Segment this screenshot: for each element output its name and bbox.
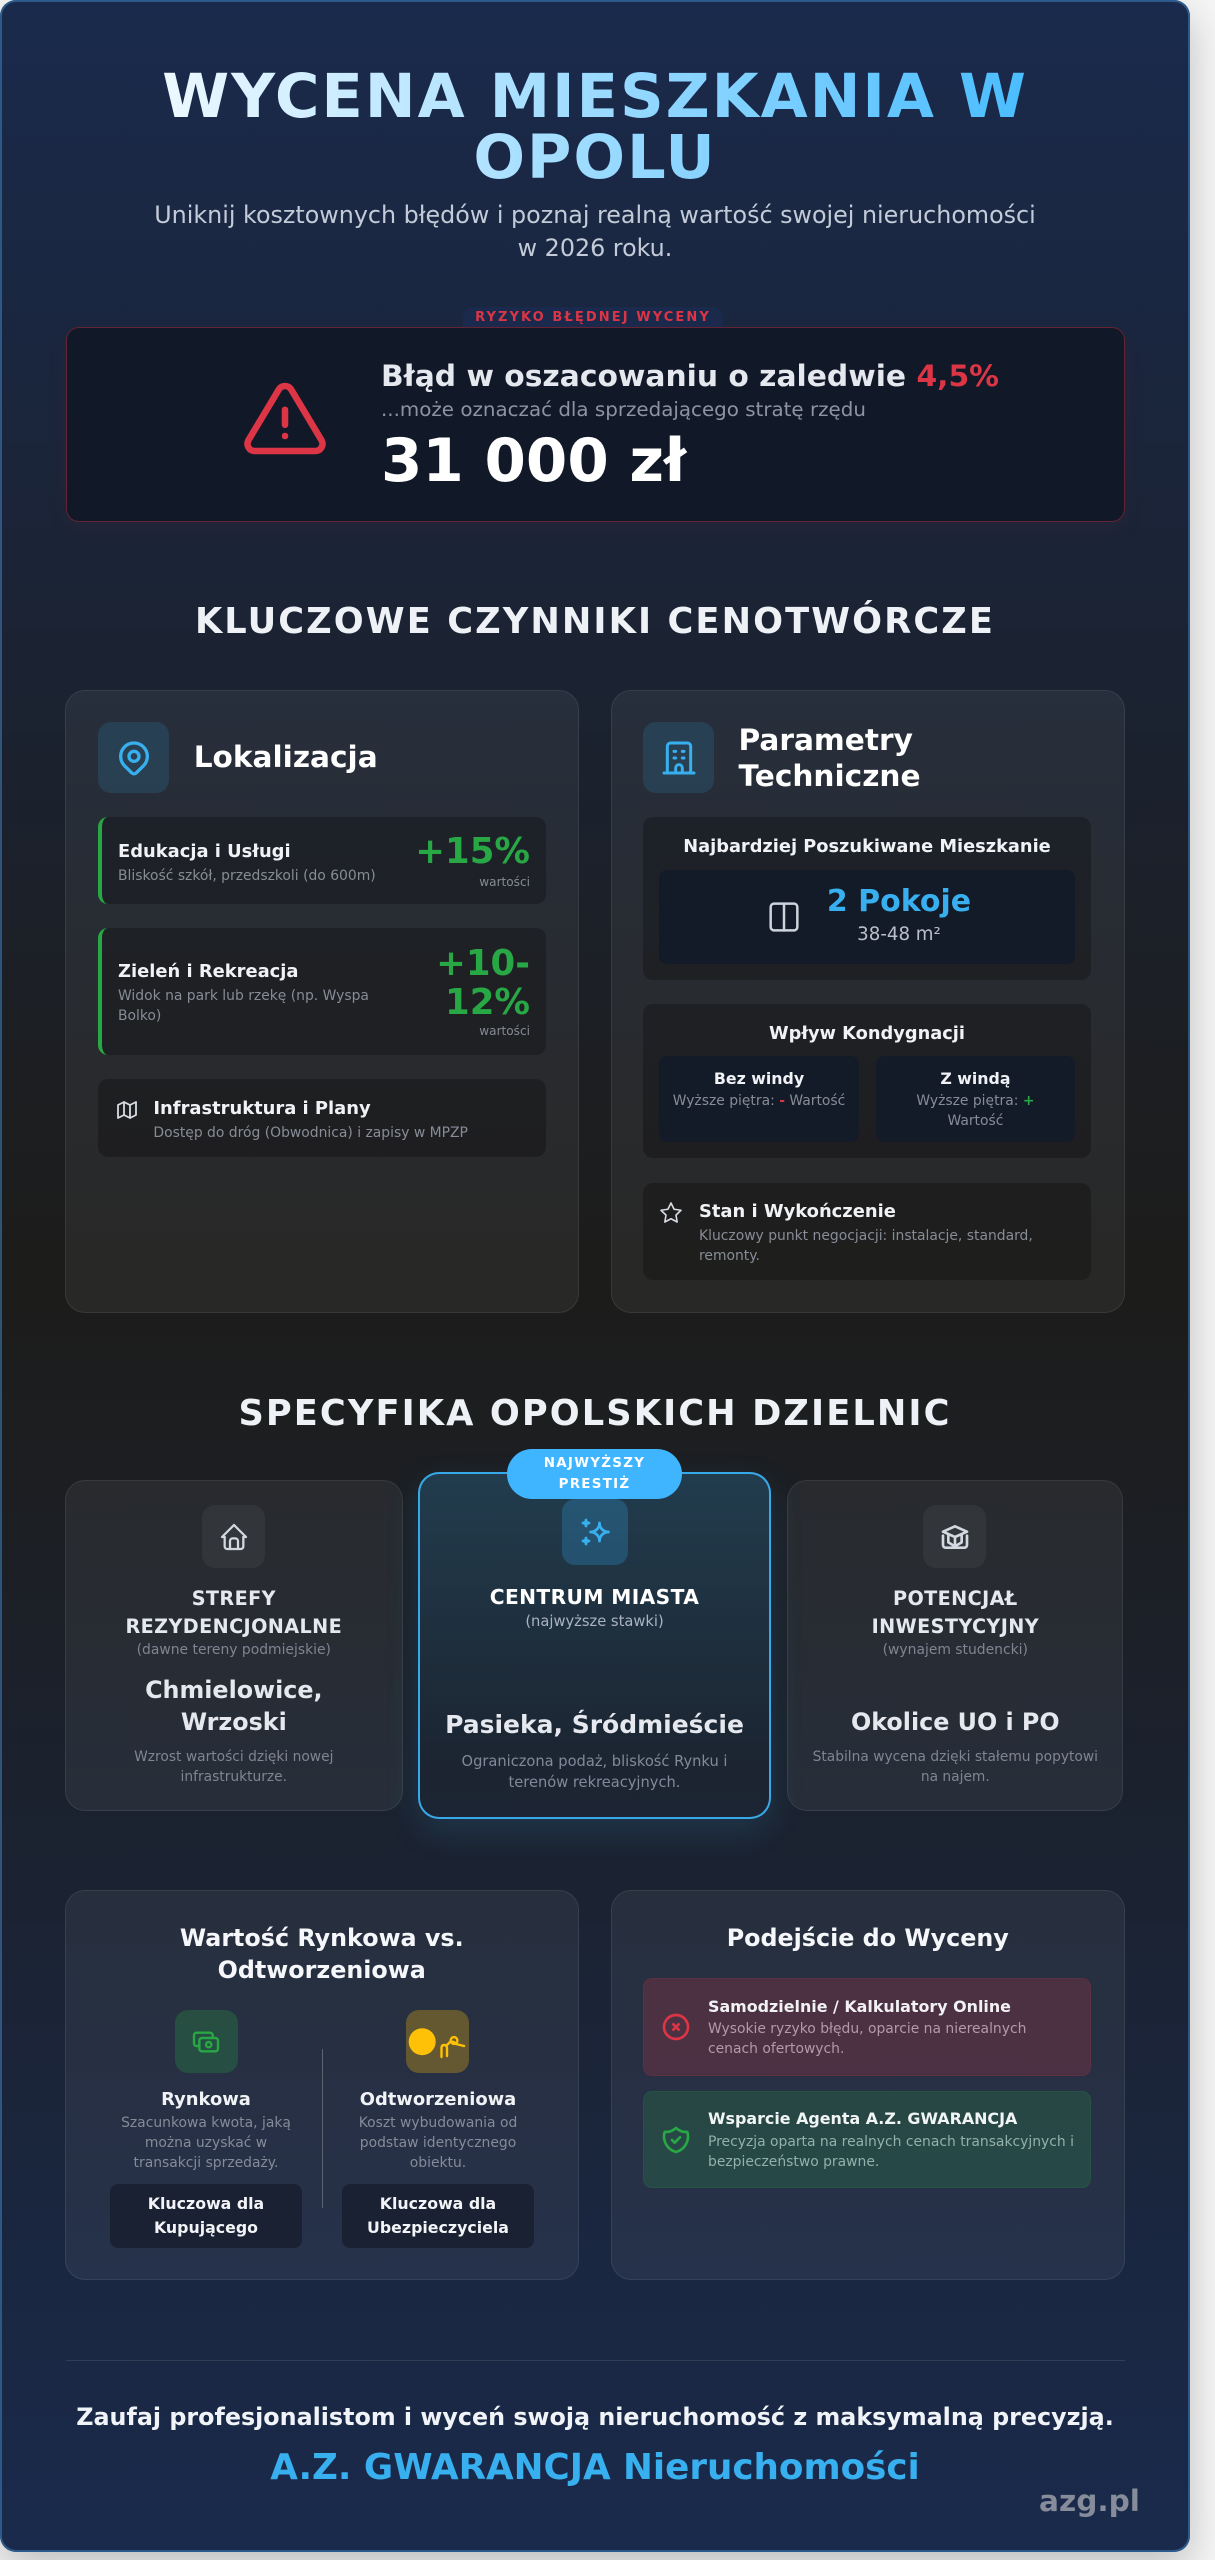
factor title: Infrastruktura i Plany: [153, 1098, 371, 1119]
card: investment potential: [787, 1480, 1123, 1811]
panel heading: Wartość Rynkowa vs.: [180, 1924, 464, 1952]
district names: [145, 1676, 323, 1736]
value: plus 10 to 12 percent: 12%: [445, 982, 530, 1023]
column description: replacement: podstaw identycznego: [360, 2135, 516, 2151]
area value: 38-48 m²: [857, 924, 941, 945]
card description: [813, 1749, 1098, 1785]
option description: Wartość: [947, 1113, 1003, 1129]
block description: Kluczowy punkt negocjacji: instalacje, standard,: [699, 1228, 1033, 1244]
highlight: two rooms: [659, 870, 1075, 964]
divider: [322, 2049, 323, 2208]
column description: market: można uzyskać w: [145, 2135, 267, 2151]
district names: Wrzoski: [181, 1708, 287, 1736]
option title: Z windą: [940, 1068, 1011, 1088]
card description: infrastrukturze.: [181, 1769, 287, 1785]
chip: key for insurer: Kluczowa dla: [380, 2194, 496, 2213]
panel heading: [180, 1924, 464, 1984]
card: city centre: [418, 1472, 771, 1819]
card heading: CENTRUM MIASTA: [490, 1585, 699, 1609]
alert subtext: ...może oznaczać dla sprzedającego stratę rzędu: [381, 398, 866, 421]
chip: key for buyer: Kupującego: [154, 2218, 258, 2237]
watermark: azg.pl: [1039, 2484, 1140, 2518]
title: [65, 67, 1125, 189]
column title: replacement: Odtworzeniowa: [360, 2088, 516, 2110]
panel heading: Lokalizacja: [194, 740, 378, 774]
panel: location: [65, 690, 578, 1313]
chip: key for insurer: Ubezpieczyciela: [367, 2218, 509, 2237]
icon: school: [923, 1505, 986, 1568]
value: plus 15 percent: +15%: [415, 831, 530, 872]
icon: shield check: [662, 2126, 690, 2154]
chip: key for buyer: [110, 2184, 302, 2248]
card description: terenów rekreacyjnych.: [509, 1774, 680, 1791]
option title: Bez windy: [714, 1068, 804, 1088]
card description: Stabilna wycena dzięki stałemu popytowi: [813, 1749, 1098, 1765]
column description: market: Szacunkowa kwota, jaką: [121, 2115, 291, 2131]
heading: districts: SPECYFIKA OPOLSKICH DZIELNIC: [238, 1392, 952, 1434]
factor description: Bolko): [118, 1008, 161, 1024]
option: no lift: [659, 1056, 859, 1142]
badge: top prestige: PRESTIŻ: [559, 1477, 630, 1492]
option: self valuation: [643, 1978, 1091, 2076]
panel: valuation approach: [611, 1890, 1124, 2280]
card heading: STREFY: [192, 1586, 276, 1610]
panel heading: Podejście do Wyceny: [727, 1924, 1009, 1952]
icon: map pin: [98, 722, 169, 793]
block: floor influence: [643, 1004, 1091, 1158]
footer call to action: Zaufaj profesjonalistom i wyceń swoją nieruchomość z maksymalną precyzją.: [76, 2403, 1114, 2431]
card: residential zones: [65, 1480, 403, 1811]
panel heading: Parametry: [738, 722, 913, 756]
alert amount: 31 000 zł: [381, 427, 686, 496]
factor description: Bliskość szkół, przedszkoli (do 600m): [118, 868, 376, 884]
card description: na najem.: [921, 1769, 990, 1785]
icon: circle x: [662, 2014, 690, 2040]
badge: top prestige: [507, 1449, 682, 1499]
panel heading: Techniczne: [738, 758, 921, 792]
tag: risk label: [463, 307, 723, 328]
option description: Wysokie ryzyko błędu, oparcie na nierealnych: [708, 2021, 1026, 2037]
subtitle: w 2026 roku.: [518, 234, 672, 262]
card heading: REZYDENCJONALNE: [125, 1614, 342, 1638]
factor title: Zieleń i Rekreacja: [118, 961, 298, 982]
icon: warning triangle: [244, 382, 326, 454]
district names: Chmielowice,: [145, 1676, 323, 1704]
title: WYCENA MIESZKANIA W: [162, 62, 1028, 132]
factor description: Dostęp do dróg (Obwodnica) i zapisy w MPZP: [153, 1124, 468, 1140]
block title: Wpływ Kondygnacji: [769, 1022, 965, 1044]
column description: replacement: obiektu.: [410, 2155, 466, 2171]
district names: Pasieka, Śródmieście: [445, 1710, 744, 1739]
option description: [708, 2134, 1074, 2170]
icon: sparkles: [562, 1499, 628, 1565]
column description: market: [121, 2115, 291, 2171]
card description: Wzrost wartości dzięki nowej: [134, 1749, 333, 1765]
option description: bezpieczeństwo prawne.: [708, 2154, 879, 2170]
card heading: INWESTYCYJNY: [872, 1614, 1039, 1638]
option: with lift: [876, 1056, 1075, 1142]
column title: market: Rynkowa: [161, 2088, 251, 2110]
option description: Precyzja oparta na realnych cenach transakcyjnych i: [708, 2134, 1074, 2150]
option title: Wsparcie Agenta A.Z. GWARANCJA: [708, 2109, 1017, 2128]
card note: (wynajem studencki): [883, 1642, 1028, 1658]
factor: infrastructure: [98, 1079, 546, 1157]
card note: (najwyższe stawki): [525, 1613, 664, 1630]
option title: Samodzielnie / Kalkulatory Online: [708, 1997, 1011, 2016]
tag: risk label: RYZYKO BŁĘDNEJ WYCENY: [475, 310, 711, 325]
card description: Ograniczona podaż, bliskość Rynku i: [462, 1753, 727, 1770]
chip: key for insurer: [342, 2184, 534, 2248]
icon: star: [660, 1202, 682, 1223]
value caption: wartości: [479, 875, 530, 889]
option: agent support: [643, 2091, 1091, 2188]
panel: technical parameters: [611, 690, 1124, 1313]
badge: top prestige: NAJWYŻSZY: [544, 1456, 645, 1471]
icon: map: [117, 1101, 137, 1119]
factor description: [118, 988, 369, 1024]
column description: replacement: [359, 2115, 517, 2171]
panel: market vs replacement value: [65, 1890, 578, 2280]
panel heading: Odtworzeniowa: [218, 1956, 426, 1984]
factor: education: [98, 817, 546, 904]
district names: Okolice UO i PO: [851, 1708, 1060, 1736]
value: plus 10 to 12 percent: [436, 943, 530, 1023]
icon: building: [643, 722, 714, 793]
card heading: [125, 1586, 342, 1638]
option description: [708, 2021, 1026, 2057]
title: OPOLU: [473, 123, 717, 193]
card note: (dawne tereny podmiejskie): [137, 1642, 331, 1658]
footer brand: A.Z. GWARANCJA Nieruchomości: [270, 2447, 920, 2488]
icon: house: [202, 1505, 265, 1568]
option description: Wyższe piętra: - Wartość: [673, 1092, 845, 1108]
card description: [462, 1753, 727, 1791]
block title: Stan i Wykończenie: [699, 1201, 896, 1222]
card heading: POTENCJAŁ: [893, 1586, 1018, 1610]
factor description: Widok na park lub rzekę (np. Wyspa: [118, 988, 369, 1004]
factor: greenery: [98, 928, 546, 1055]
subtitle: [154, 200, 1036, 262]
block: most wanted flat: [643, 817, 1091, 980]
icon: layout: [769, 902, 799, 932]
panel heading: [738, 722, 921, 792]
column description: replacement: Koszt wybudowania od: [359, 2115, 517, 2131]
icon: cash: [174, 2010, 238, 2073]
column description: market: transakcji sprzedaży.: [134, 2155, 278, 2171]
factor title: Edukacja i Usługi: [118, 840, 291, 862]
subtitle: Uniknij kosztownych błędów i poznaj realną wartość swojej nieruchomości: [154, 200, 1036, 228]
option description: [916, 1092, 1034, 1129]
block: condition: [643, 1182, 1091, 1280]
card description: [134, 1749, 333, 1785]
alert headline: Błąd w oszacowaniu o zaledwie 4,5%: [381, 359, 999, 394]
icon: coin and tool: [406, 2010, 469, 2073]
heading: key factors: KLUCZOWE CZYNNIKI CENOTWÓRCZE: [195, 601, 995, 642]
panel: risk alert: [66, 327, 1124, 522]
option description: Wyższe piętra: +: [916, 1092, 1034, 1108]
rooms value: 2 Pokoje: [827, 884, 971, 919]
block title: Najbardziej Poszukiwane Mieszkanie: [683, 836, 1051, 857]
card heading: [872, 1586, 1039, 1638]
value caption: wartości: [479, 1024, 530, 1038]
block description: remonty.: [699, 1248, 760, 1264]
value: plus 10 to 12 percent: +10-: [436, 943, 530, 984]
chip: key for buyer: Kluczowa dla: [148, 2194, 264, 2213]
block description: [699, 1228, 1033, 1264]
option description: cenach ofertowych.: [708, 2041, 844, 2057]
